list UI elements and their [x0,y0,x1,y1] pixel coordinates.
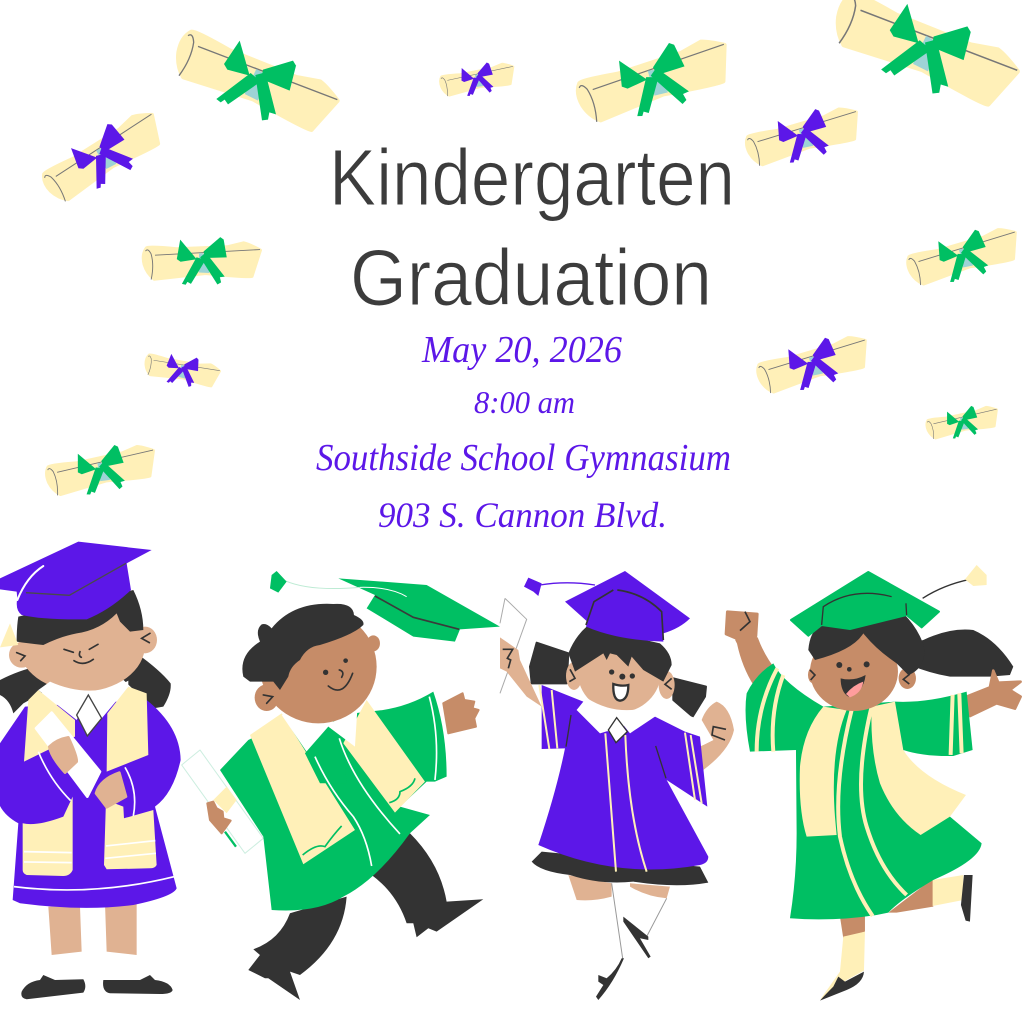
cap: green [791,572,939,636]
diploma: right green bow [902,196,1024,314]
child 4: girl in green gown jumping [726,565,1021,1001]
diploma: small left purple bow [144,341,223,399]
event details: Southside School Gymnasium [316,437,731,479]
event details: 903 S. Cannon Blvd. [378,495,667,535]
cap: green, tossed [338,578,500,642]
diploma: top centre-left green bow [178,32,337,130]
title: Kindergarten [329,133,735,222]
child 2: boy in green gown tossing cap [182,571,500,1000]
face: boy smiling [263,658,353,703]
title [329,133,735,322]
diploma: small top centre purple bow [436,41,520,117]
event details: May 20, 2026 [421,329,622,371]
cap: purple [0,542,152,619]
title: Graduation [350,233,712,322]
cap: purple [565,571,690,642]
child 3: girl in purple gown jumping [500,571,734,1000]
diploma: lower left green bow [41,413,164,525]
diploma: mid left green bow [138,206,269,314]
diploma: top right green bow [838,0,1017,104]
face: girl smiling [17,633,150,663]
diploma: small right green bow [923,385,1004,459]
face: girl laughing [740,612,910,697]
event details: 8:00 am [474,384,575,420]
child 1: girl in purple gown holding diploma [0,542,181,999]
event details [316,329,731,535]
diploma: mid right purple bow [752,304,877,422]
diploma: left purple bow [38,84,170,226]
diploma: top centre-right green bow [570,0,742,161]
diploma: upper right purple bow [741,75,869,195]
face: girl singing [503,649,726,740]
